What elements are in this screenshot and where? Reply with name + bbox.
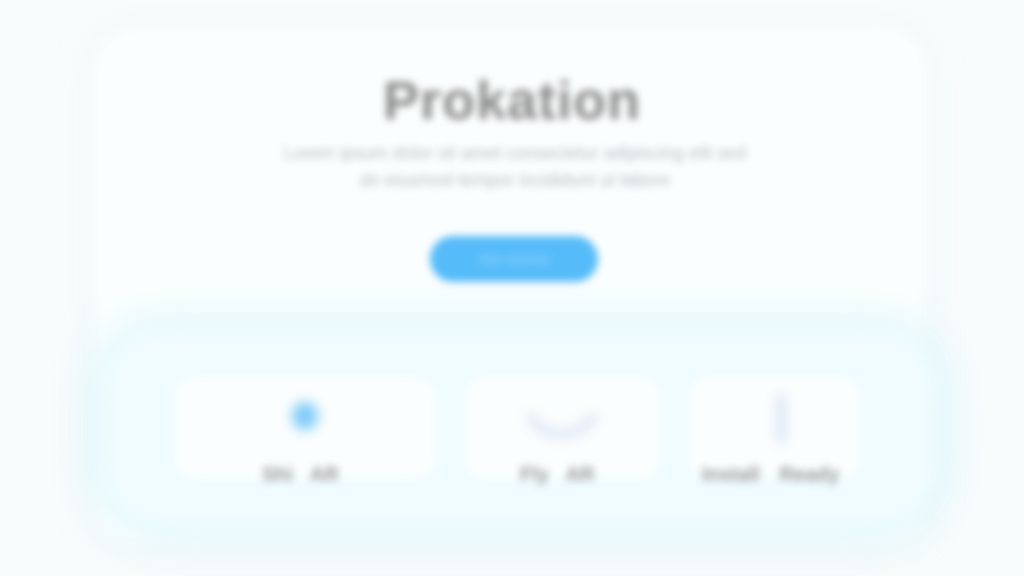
label 1: Shi AR [262, 464, 339, 486]
icon: wave [528, 414, 597, 441]
card 3 [690, 378, 860, 478]
title: Prokation [383, 71, 641, 131]
main panel [95, 28, 925, 543]
button [430, 236, 598, 282]
card 2 [465, 378, 660, 478]
lower panel [105, 330, 935, 525]
icon: blue dot [292, 402, 318, 430]
icon: vertical bar [777, 394, 785, 444]
label 3: Install Ready [702, 464, 839, 486]
label 2: Fly AR [520, 464, 595, 486]
subtitle text: Lorem ipsum dolor sit amet consectetur adipiscing elit sed do eiusmod tempor incididunt ut labore [284, 143, 746, 190]
button: Get started [479, 251, 549, 267]
card 1 [175, 378, 435, 478]
